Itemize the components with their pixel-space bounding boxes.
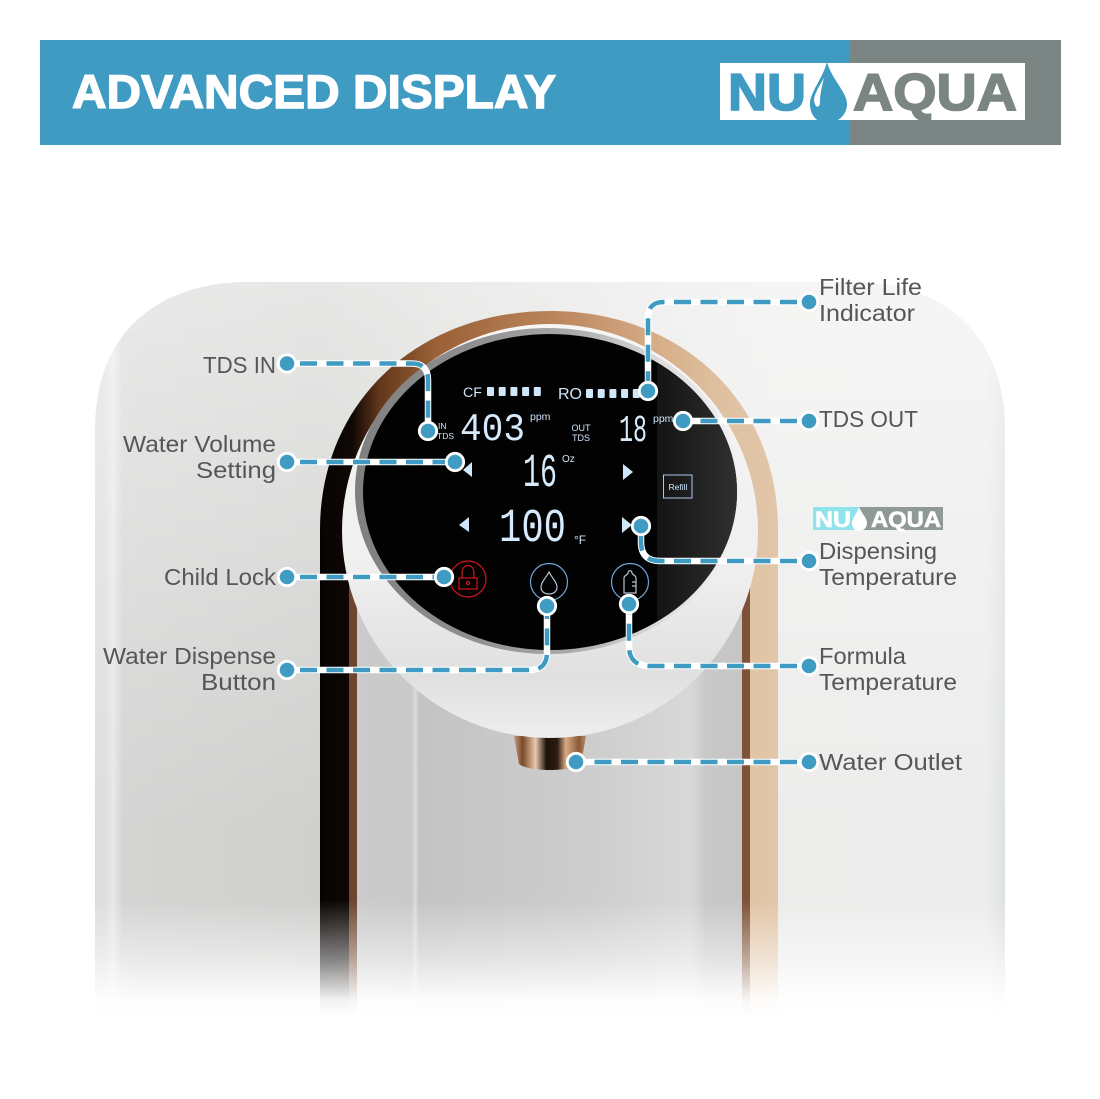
ppm unit right: ppm [653, 413, 674, 425]
callout: TDS IN [203, 352, 437, 440]
icon: child lock [450, 561, 486, 597]
left arrow volume [463, 462, 472, 477]
right arrow temperature [622, 517, 632, 533]
callout: TDS IN: TDS IN [203, 352, 276, 378]
display rim [355, 328, 741, 654]
brand logo: NU [728, 64, 806, 122]
callout: water outlet: Water Outlet [819, 749, 963, 775]
callout: child lock: Child Lock [164, 564, 277, 590]
callout: dispensing temperature: Temperature [819, 564, 957, 590]
callout: filter life indicator: Indicator [819, 300, 915, 326]
spout [514, 736, 586, 770]
fahrenheit unit: °F [574, 533, 586, 547]
ppm unit: ppm [530, 411, 551, 423]
icon: water drop button [530, 564, 568, 600]
callout: water volume setting: Setting [196, 457, 276, 483]
brand logo: AQUA [853, 64, 1017, 122]
callout: water dispense button: Water Dispense [103, 643, 276, 669]
display readouts [437, 385, 692, 600]
oz unit: Oz [562, 454, 575, 465]
water dispenser body [80, 282, 1020, 1018]
callout: dispensing temperature: Dispensing [819, 538, 937, 564]
header banner [40, 40, 1061, 145]
bottom fade [80, 900, 1020, 1018]
callout: water dispense button: Button [201, 669, 276, 695]
filter indicator CF [463, 385, 541, 400]
callout: water volume setting: Water Volume [123, 431, 276, 457]
volume reading: 16 [523, 448, 557, 501]
callout: filter life indicator: Filter Life [819, 274, 922, 300]
title: ADVANCED DISPLAY [72, 65, 556, 118]
callout: TDS OUT [674, 406, 918, 432]
callout: dispensing temperature [632, 517, 957, 590]
refill button [664, 475, 692, 498]
callout: filter life indicator [639, 274, 922, 400]
watermark logo: NU [815, 507, 851, 532]
refill button: Refill [669, 482, 688, 492]
right arrow volume [623, 464, 633, 480]
IN TDS label: TDS [437, 431, 454, 441]
display screen [363, 330, 747, 655]
rose gold trim arch [320, 311, 778, 1015]
callout: water volume setting [123, 431, 464, 483]
filter indicator RO [558, 386, 640, 403]
callout: water outlet [567, 749, 963, 775]
inner panel [357, 560, 742, 1015]
temperature reading: 100 [499, 503, 566, 556]
watermark logo [813, 507, 943, 532]
watermark logo: AQUA [871, 507, 941, 532]
callout: water dispense button [103, 597, 556, 695]
OUT TDS label: OUT [572, 423, 590, 433]
filter indicator CF: CF [463, 385, 482, 400]
brand logo [720, 62, 1025, 123]
TDS out reading: 18 [619, 410, 647, 453]
callout: formula temperature [620, 595, 957, 695]
TDS in reading: 403 [460, 408, 525, 452]
callout: TDS OUT: TDS OUT [819, 406, 918, 432]
callout: child lock [164, 564, 453, 590]
display housing [342, 324, 758, 738]
icon: baby bottle button [612, 564, 648, 600]
callout: formula temperature: Temperature [819, 669, 957, 695]
IN TDS label: IN [438, 421, 446, 431]
OUT TDS label: TDS [572, 433, 590, 443]
callout: formula temperature: Formula [819, 643, 906, 669]
left arrow temperature [459, 517, 469, 532]
filter indicator RO: RO [558, 386, 582, 403]
